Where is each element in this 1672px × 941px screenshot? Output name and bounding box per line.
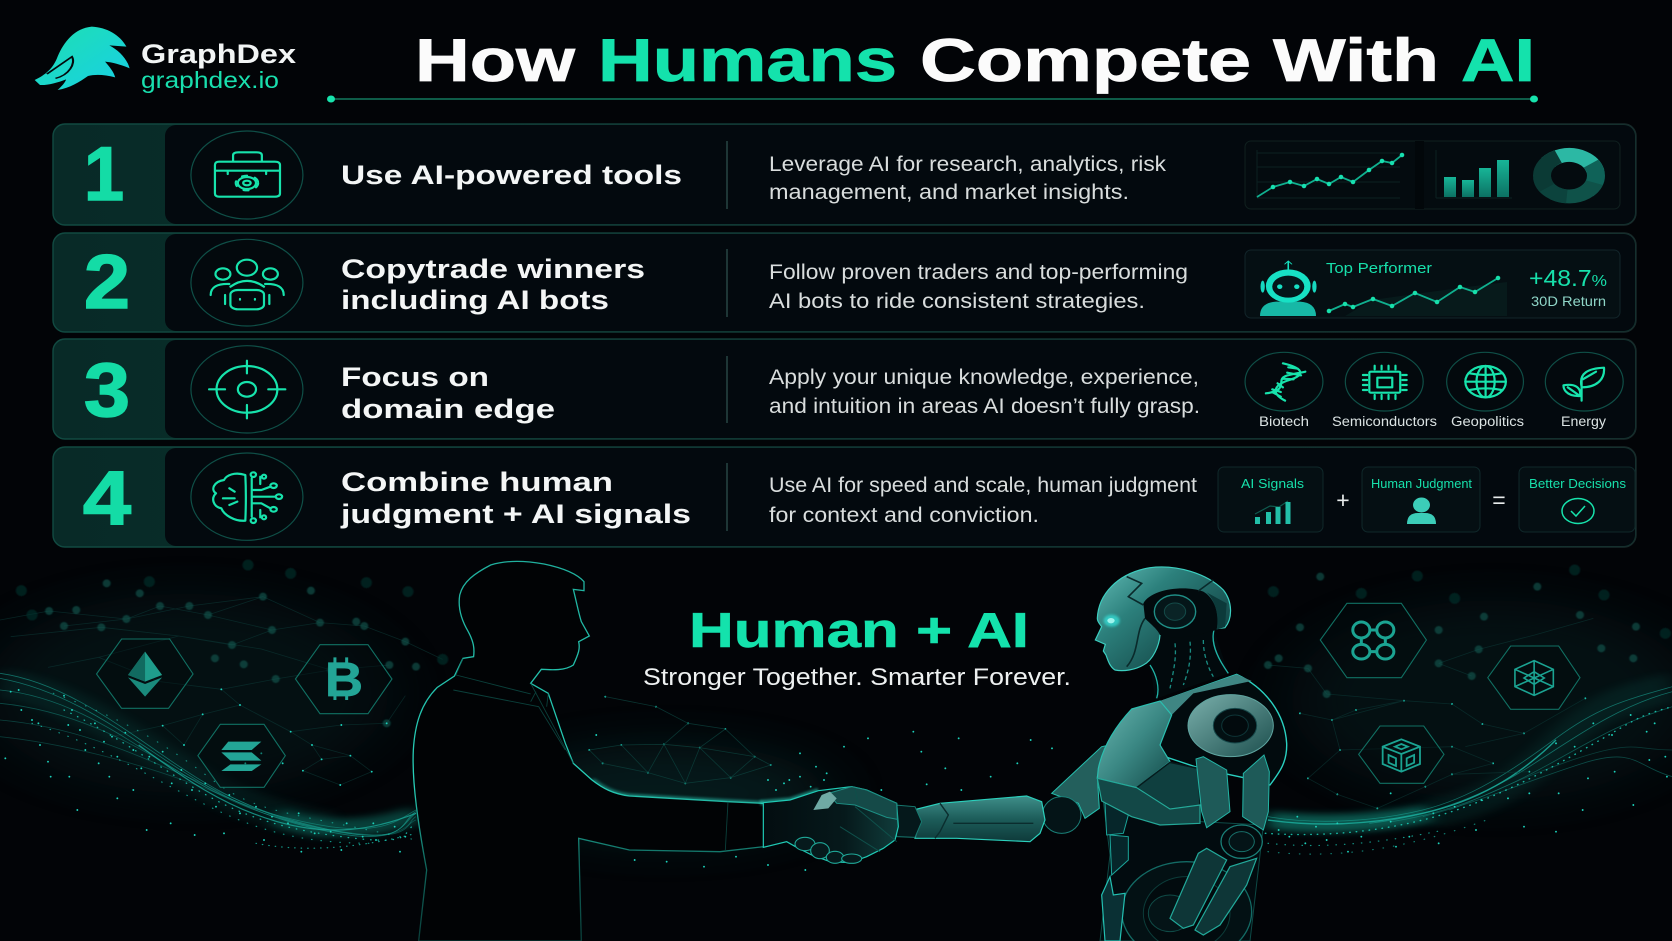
step heading: Combine human — [341, 467, 613, 497]
icon: target — [191, 346, 303, 433]
step description — [769, 474, 1197, 527]
step description: Follow proven traders and top-performing — [769, 261, 1188, 284]
subheading: Stronger Together. Smarter Forever. — [643, 664, 1071, 691]
robot wrist — [895, 805, 922, 837]
return label: 30D Return — [1531, 293, 1606, 309]
equation: ai signals + human judgment = better decisions — [1218, 467, 1635, 532]
icon: toolbox — [191, 131, 303, 219]
domain icons — [1245, 352, 1623, 429]
step description: Use AI for speed and scale, human judgment — [769, 474, 1197, 497]
step heading: domain edge — [341, 394, 555, 424]
panel: step 4 — [53, 447, 1636, 547]
title: With — [1273, 27, 1439, 94]
particles: right — [844, 698, 1667, 852]
step heading: Use AI-powered tools — [341, 160, 682, 190]
step description — [769, 366, 1200, 418]
robot — [913, 567, 1287, 941]
step heading: including AI bots — [341, 285, 609, 315]
robot chest plate — [1097, 701, 1172, 788]
robot shoulder disc — [1188, 695, 1273, 757]
icon: energy leaf — [1545, 352, 1623, 411]
tagline block — [643, 604, 1071, 691]
step description — [769, 153, 1167, 204]
wave: left particle stream — [0, 673, 416, 848]
icon: semiconductor chip — [1345, 352, 1423, 411]
robot belt plate — [1097, 778, 1200, 825]
label: top performer: Top Performer — [1326, 260, 1432, 277]
step number 2: 2 — [84, 240, 130, 325]
wave: right particle stream — [1265, 687, 1672, 854]
robot forearm plates — [1170, 848, 1257, 935]
icon: ethereum — [97, 639, 193, 708]
icon: people and bot — [191, 239, 303, 326]
robot lower body — [1100, 802, 1263, 941]
panel: step 3 — [53, 339, 1636, 439]
title: AI — [1461, 27, 1535, 94]
icon: solana — [198, 724, 285, 787]
card: better decisions: Better Decisions — [1529, 476, 1627, 491]
robot elbow — [1221, 825, 1262, 858]
title — [415, 27, 1535, 94]
logo url: graphdex.io — [141, 67, 279, 93]
icon: box — [1359, 726, 1444, 783]
background: glow, network and particle waves — [0, 565, 1672, 870]
step heading — [340, 467, 691, 529]
human silhouette — [413, 561, 764, 941]
crypto hexagons: left — [97, 639, 392, 787]
chart panel: line, bars and donut — [1245, 141, 1620, 209]
step description: Apply your unique knowledge, experience, — [769, 366, 1199, 389]
thumb — [813, 792, 837, 810]
icon: biotech — [1245, 352, 1323, 411]
step description: AI bots to ride consistent strategies. — [769, 290, 1145, 313]
title: Humans — [598, 27, 897, 94]
icon: brain circuit — [191, 453, 303, 540]
panel: step 1 — [53, 124, 1636, 225]
step description: for context and conviction. — [769, 504, 1039, 527]
particles: left — [5, 689, 827, 870]
robot head — [1095, 567, 1231, 671]
icon: node network — [1320, 603, 1426, 678]
label: geopolitics: Geopolitics — [1451, 414, 1524, 429]
icon: fox logo mark — [35, 27, 130, 90]
label: semiconductors: Semiconductors — [1332, 414, 1437, 429]
step heading: Focus on — [341, 362, 489, 392]
equals sign: = — [1492, 487, 1506, 513]
card: human judgment — [1362, 467, 1480, 532]
icon: robot — [1260, 261, 1317, 316]
network: right bokeh and links — [1268, 570, 1665, 808]
network: center links — [589, 697, 771, 783]
tech hexagons: right — [1320, 603, 1580, 783]
step description: Leverage AI for research, analytics, risk — [769, 153, 1167, 176]
step description: and intuition in areas AI doesn’t fully grasp. — [769, 395, 1200, 418]
step heading — [341, 362, 555, 424]
panel: step 2 — [53, 233, 1636, 332]
step heading — [341, 254, 645, 315]
card: ai signals — [1218, 467, 1323, 532]
bar chart — [1444, 160, 1509, 197]
robot shoulder mass — [1160, 674, 1287, 785]
top performer card — [1245, 250, 1620, 318]
card: ai signals: AI Signals — [1241, 476, 1305, 491]
knuckles — [795, 837, 862, 863]
sparkline — [1329, 278, 1498, 311]
robot front forearm — [913, 796, 1045, 842]
robot front elbow — [1042, 797, 1081, 833]
clasped hands — [763, 787, 898, 863]
robot front upper arm — [1052, 745, 1109, 818]
logo — [35, 27, 296, 93]
step heading: judgment + AI signals — [340, 499, 691, 529]
icon: globe — [1447, 352, 1523, 411]
icon: bitcoin: B — [325, 654, 363, 707]
robot abdomen plate — [1137, 762, 1200, 809]
title: How — [415, 27, 575, 94]
robot fingers — [828, 787, 897, 819]
line chart — [1257, 155, 1402, 197]
step heading: Copytrade winners — [341, 254, 645, 284]
robot neck — [1150, 630, 1228, 699]
step number 3: 3 — [84, 348, 130, 433]
logo name: GraphDex — [141, 39, 296, 69]
step number 4: 4 — [83, 456, 131, 541]
icon: bitcoin — [295, 645, 392, 714]
step description: management, and market insights. — [769, 181, 1129, 204]
step number 1: 1 — [84, 132, 124, 217]
icon: wire cube — [1488, 646, 1580, 709]
title: Compete — [920, 27, 1251, 94]
label: biotech: Biotech — [1259, 414, 1309, 429]
title underline — [327, 96, 1538, 102]
network: left bokeh and links — [0, 565, 443, 785]
card: better decisions — [1519, 467, 1635, 532]
return value: +48.7 % — [1529, 265, 1607, 291]
handshake — [760, 787, 922, 863]
plus sign: + — [1336, 487, 1350, 513]
card: human judgment: Human Judgment — [1371, 476, 1472, 491]
robot upper arm plates — [1196, 755, 1269, 830]
step description — [769, 261, 1188, 313]
donut chart — [1531, 146, 1607, 205]
label: energy: Energy — [1561, 414, 1606, 429]
heading: human + ai: Human + AI — [689, 604, 1029, 658]
